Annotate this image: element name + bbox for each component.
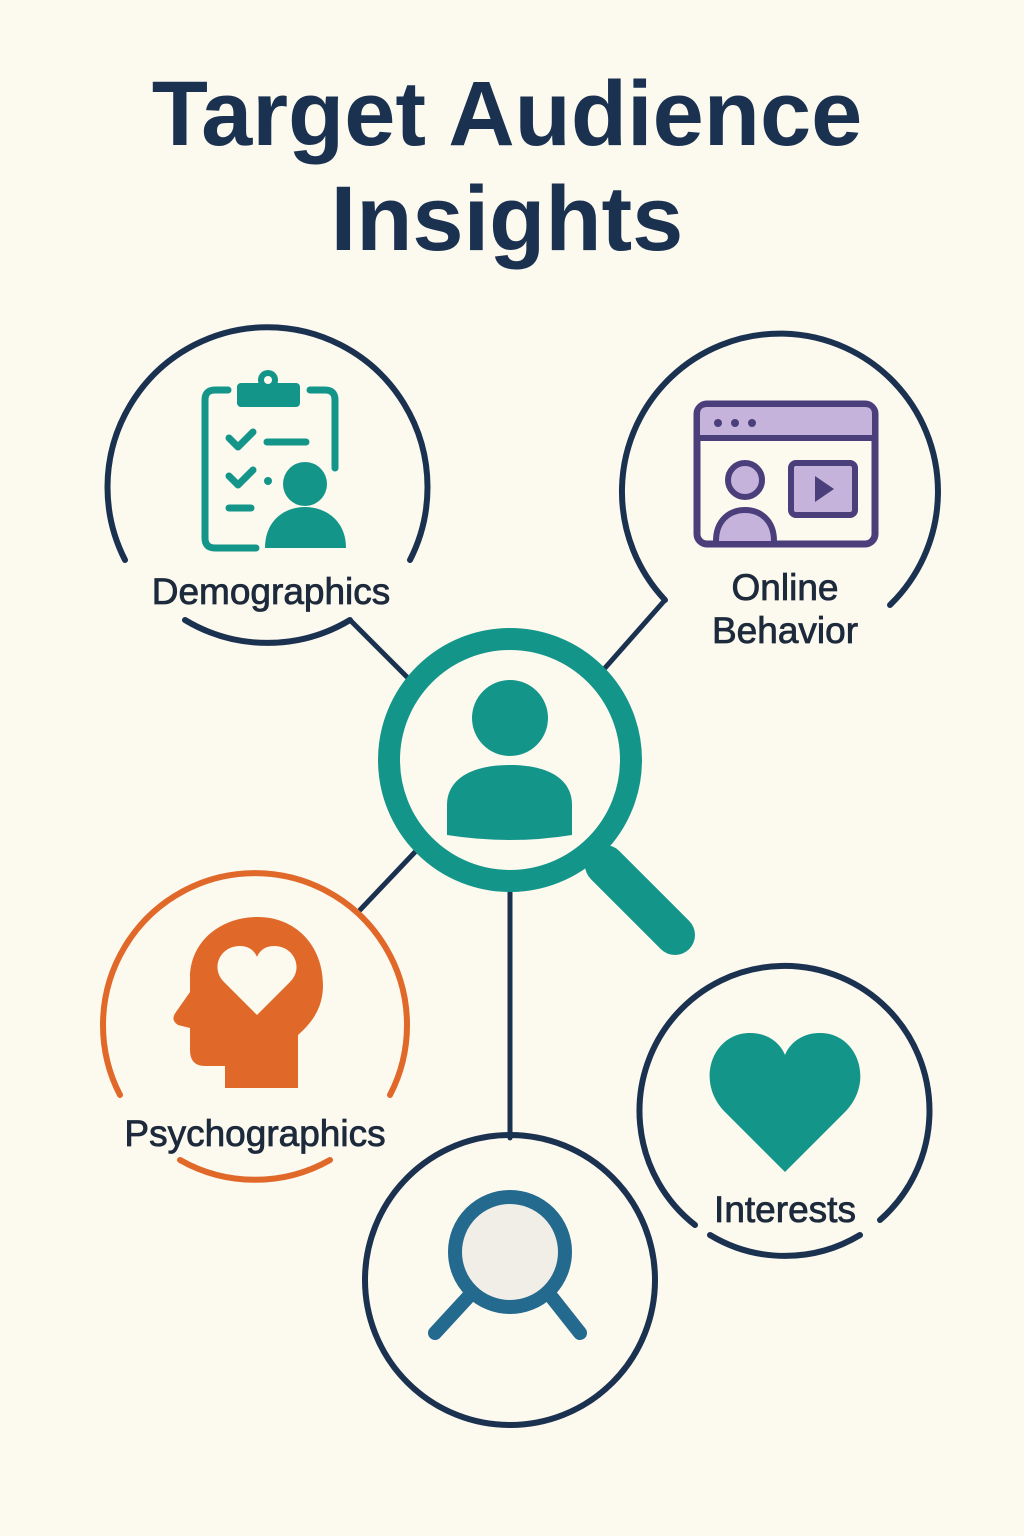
label: Interests: Interests <box>714 1189 856 1230</box>
icon: browser window <box>697 404 875 544</box>
icon: head with heart <box>173 917 323 1088</box>
icon: clipboard with person <box>205 370 346 548</box>
connector lines <box>350 600 665 1138</box>
center magnifier <box>389 639 675 935</box>
label: Online Behavior: Online <box>732 567 838 608</box>
panel: online behavior <box>622 334 938 651</box>
icon: person <box>447 680 572 840</box>
panel: psychographics <box>103 873 407 1180</box>
panel: demographics <box>107 327 428 643</box>
panel: interests <box>639 966 929 1256</box>
icon: heart <box>710 1033 860 1172</box>
label: Online Behavior: Behavior <box>712 610 858 651</box>
title: Insights <box>331 168 683 270</box>
label: Psychographics: Psychographics <box>124 1113 386 1154</box>
label: Online Behavior <box>712 567 858 651</box>
icon: search <box>435 1197 580 1333</box>
panel: bottom search <box>365 1135 655 1425</box>
title <box>152 63 862 270</box>
title: Target Audience <box>152 63 862 165</box>
label: Demographics: Demographics <box>152 571 390 612</box>
